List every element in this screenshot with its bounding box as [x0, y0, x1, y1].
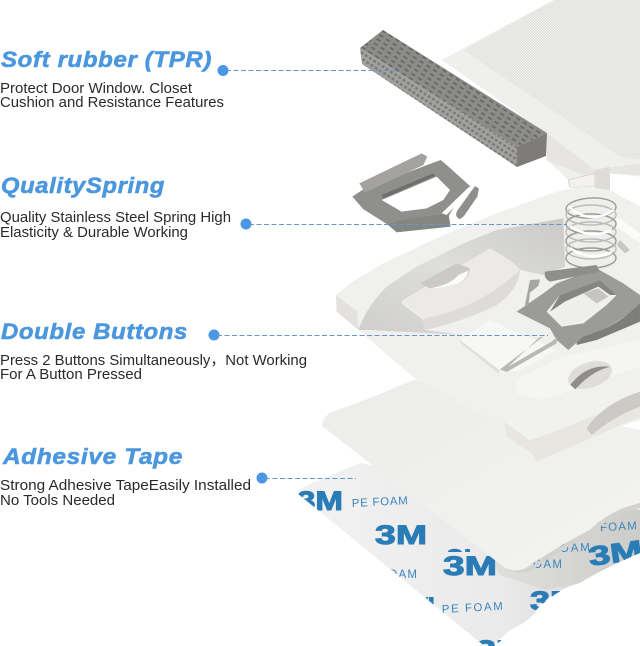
description: double buttons: Press 2 Buttons Simultaneously，Not Working — [0, 353, 307, 369]
tape logos: OAM — [533, 559, 562, 571]
leader line: soft rubber — [218, 65, 400, 76]
backing plate — [322, 380, 640, 573]
tape logos: 3M — [587, 535, 640, 572]
spring — [566, 197, 616, 270]
tape logos: OAM — [560, 542, 590, 555]
tape logos: 3M — [395, 582, 435, 612]
upper housing with diamond texture — [442, 0, 640, 193]
adhesive tape callout — [0, 444, 251, 509]
tape logos: PE FOAM — [442, 601, 503, 616]
tape logos: 3M — [443, 551, 497, 581]
heading: double buttons: Double Buttons — [1, 319, 188, 344]
description: adhesive tape — [0, 478, 251, 509]
description: double buttons — [0, 353, 307, 383]
tape logos: FOAM — [380, 569, 417, 581]
rim wall shadow — [358, 218, 565, 335]
leader line: spring — [240, 218, 567, 230]
tape logos — [297, 486, 640, 646]
description: soft rubber: Protect Door Window. Closet — [0, 81, 192, 97]
description: quality spring: Quality Stainless Steel Spring High — [0, 210, 231, 226]
button window — [420, 263, 470, 288]
right side rails — [617, 217, 640, 243]
left front face — [336, 295, 358, 330]
left slide button — [402, 248, 520, 330]
tape logos: 3M — [297, 486, 343, 516]
heading: quality spring: QualitySpring — [1, 173, 165, 198]
description: adhesive tape: Strong Adhesive TapeEasily Installed — [0, 478, 251, 494]
spring legs — [500, 337, 557, 372]
description: adhesive tape: No Tools Needed — [0, 493, 115, 509]
tape logos: E FOAM — [587, 520, 637, 535]
leader line: tape — [256, 472, 356, 484]
soft rubber callout — [0, 47, 224, 111]
description: quality spring: Elasticity & Durable Working — [0, 225, 188, 241]
lower floor strips — [460, 320, 557, 372]
rubber bar — [360, 30, 547, 167]
3M foam tape — [297, 463, 640, 646]
tape logos: 3M — [530, 586, 580, 616]
quality spring callout — [0, 173, 231, 241]
heading: adhesive tape: Adhesive Tape — [2, 444, 183, 469]
tape logos: PE FOAM — [352, 495, 408, 510]
floating spring clip — [352, 153, 479, 232]
leader line: buttons — [208, 330, 548, 340]
heading: soft rubber: Soft rubber (TPR) — [1, 47, 212, 72]
description: soft rubber: Cushion and Resistance Features — [0, 95, 224, 111]
front right button — [503, 382, 640, 462]
clip seated in base — [500, 265, 640, 372]
description: soft rubber — [0, 81, 224, 111]
oval opening — [565, 356, 615, 394]
description: double buttons: For A Button Pressed — [0, 367, 142, 383]
main base — [336, 187, 640, 453]
tape logos: 3M — [446, 544, 490, 574]
description: quality spring — [0, 210, 231, 241]
double buttons callout — [0, 319, 307, 383]
dark lower housing — [577, 302, 640, 345]
tape logos: 3M — [375, 520, 427, 550]
